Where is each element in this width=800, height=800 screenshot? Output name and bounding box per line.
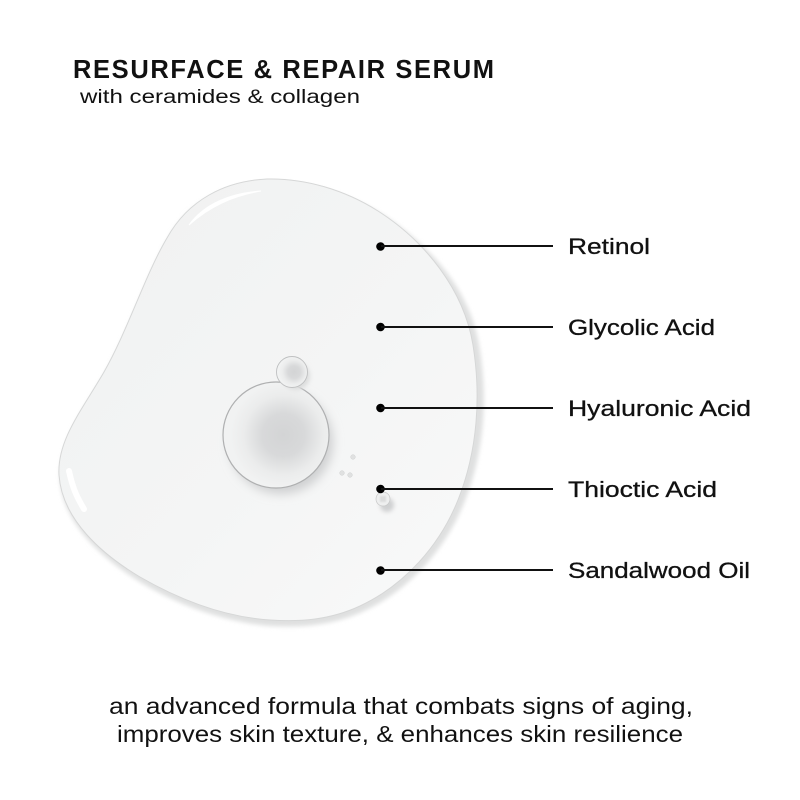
large droplet [223,382,333,494]
swatch body [59,179,477,621]
callout: Retinol: Retinol [568,234,650,259]
micro droplets [340,455,355,477]
subtitle: with ceramides & collagen [79,87,360,108]
callout: Sandalwood Oil: Sandalwood Oil [568,558,750,583]
small droplet [276,356,310,390]
callout: Thioctic Acid: Thioctic Acid [568,477,717,502]
serum swatch [59,179,484,627]
callout: Glycolic Acid: Glycolic Acid [568,315,715,340]
swatch shadow [60,183,484,627]
highlight: top left [189,191,261,225]
callout: Thioctic Acid [376,477,717,502]
callout: Sandalwood Oil [376,558,750,583]
description [109,693,693,747]
callout: Hyaluronic Acid: Hyaluronic Acid [568,396,751,421]
callout: Retinol [376,234,650,259]
tiny droplet [376,492,394,512]
highlight: left edge [69,471,84,509]
title: RESURFACE & REPAIR SERUM [73,56,494,84]
callout: Hyaluronic Acid [376,396,751,421]
callout: Glycolic Acid [376,315,715,340]
description: an advanced formula that combats signs of aging, [109,693,693,719]
description: improves skin texture, & enhances skin resilience [117,721,683,747]
